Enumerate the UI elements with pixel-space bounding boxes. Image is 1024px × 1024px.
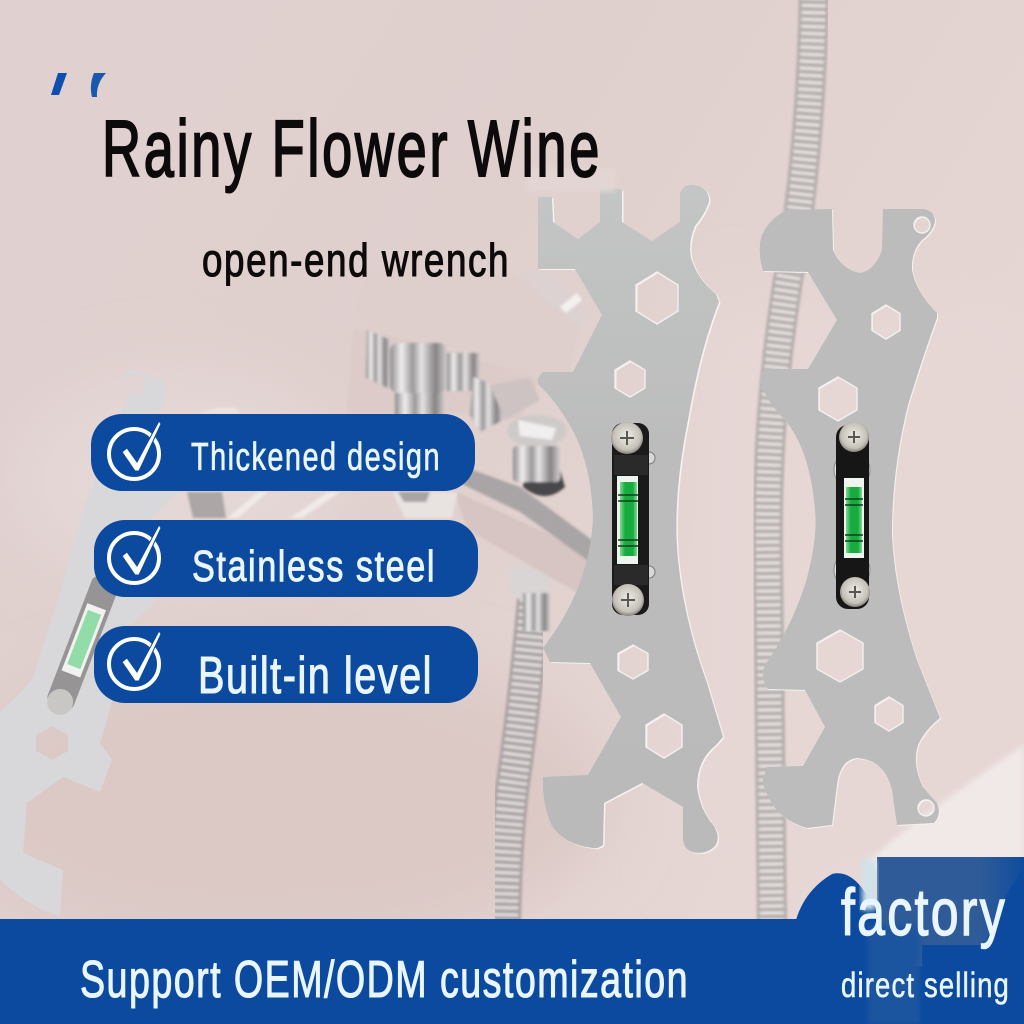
hex hole rims bbox=[817, 217, 934, 816]
haze over wrench tips bbox=[526, 168, 616, 192]
ghost level bbox=[42, 575, 120, 719]
shower hose: right bbox=[768, 0, 814, 925]
pill: thickened design: Thickened design bbox=[191, 436, 441, 479]
faucet chrome valve bbox=[366, 330, 540, 432]
icon: check circle bbox=[109, 421, 161, 479]
bubble level: right bbox=[834, 422, 870, 609]
faucet chrome strip bbox=[462, 470, 592, 562]
quote marks bbox=[51, 73, 106, 97]
corner panel bbox=[877, 857, 1024, 967]
icon: check circle bbox=[109, 631, 161, 689]
bubble level: left bbox=[611, 422, 655, 616]
pill: built-in level bbox=[94, 626, 478, 705]
hose connector bbox=[510, 567, 550, 631]
bottom banner bbox=[0, 857, 1024, 1024]
shower hose: lower bbox=[504, 600, 534, 925]
pill: built-in level: Built-in level bbox=[198, 647, 433, 705]
faucet body bar bbox=[453, 490, 590, 597]
bathtub corner bbox=[868, 745, 1024, 870]
subtitle: open-end wrench bbox=[202, 234, 510, 286]
title: Rainy Flower Wine bbox=[102, 104, 602, 193]
icon: check circle bbox=[109, 525, 161, 583]
soft shape above first pill bbox=[200, 407, 240, 414]
pill: thickened design bbox=[91, 414, 475, 491]
wrench: right steel wrench bbox=[760, 209, 941, 829]
pill: stainless steel: Stainless steel bbox=[192, 542, 436, 591]
lever highlight near wrench bbox=[520, 270, 590, 326]
faucet pale spout bbox=[347, 330, 540, 420]
wrench: left steel wrench bbox=[538, 185, 724, 854]
faucet lever block bbox=[353, 273, 580, 377]
hex hole rims bbox=[615, 272, 682, 758]
pill: stainless steel bbox=[94, 520, 478, 597]
faucet knob bbox=[507, 415, 567, 496]
ghost wrench: faded left wrench behind pills bbox=[0, 370, 190, 916]
lower-left spout bbox=[187, 492, 458, 518]
bottom banner: Support OEM/ODM customization bbox=[80, 951, 689, 1009]
banner tab bbox=[796, 873, 880, 925]
